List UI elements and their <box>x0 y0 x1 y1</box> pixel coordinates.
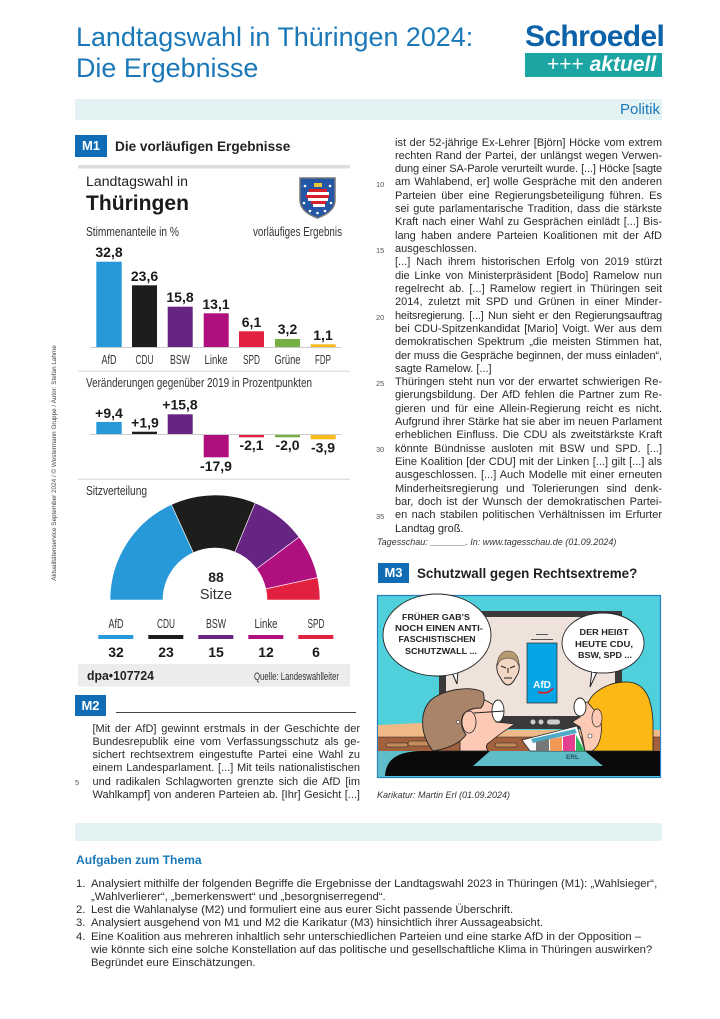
tasks list: 3. <box>76 917 85 929</box>
chart note: vorläufiges Ergebnis <box>253 224 342 239</box>
M1 badge: M1 <box>82 138 100 153</box>
bar chart: vote shares: 23,6 <box>131 268 158 284</box>
line numbers: 10 <box>376 180 384 188</box>
legend: seats per party: 15 <box>208 644 224 660</box>
M2 continued text: Thüringen steht nun vor der erwartet schwierigen Re- <box>395 376 662 388</box>
tasks list: 1. <box>76 878 85 890</box>
legend: seats per party: 12 <box>258 644 274 660</box>
M2 continued text: demokratischen Spektrum „die meisten Stimmen hat, <box>395 336 662 348</box>
M1 heading: Die vorläufigen Ergebnisse <box>115 139 290 154</box>
chart subtitle: Stimmenanteile in % <box>86 224 179 239</box>
legend: seats per party: BSW <box>206 616 226 631</box>
M2 text: [Mit der AfD] gewinnt erstmals in der Geschichte der <box>92 722 360 734</box>
M2 continued text: 2014, zuletzt mit SPD und Grünen in einer Minder- <box>395 296 662 308</box>
M2 continued text: heitsregierung. [...] Nun sieht er den Regierungsauftrag <box>395 310 662 322</box>
bar chart: vote shares: Grüne <box>274 352 300 367</box>
M2 continued text: Landtag groß. <box>395 523 464 535</box>
tasks list: wie könnte sich eine solche Konstellation auf das politische und gesellschaftliche Klima in Thüringen auswirken? <box>91 944 652 956</box>
speech bubble right <box>562 613 644 687</box>
M2 text: Bundesrepublik eine vom Verfassungsschutz als ge- <box>92 736 360 748</box>
screen <box>439 611 622 729</box>
speech bubble left: FASCHISTISCHEN <box>398 635 476 644</box>
M2 continued text: rechten Rand der Partei, der unlängst wegen Verwen- <box>395 150 662 162</box>
bar chart: vote shares: 13,1 <box>202 296 230 312</box>
M2 continued text <box>395 136 662 535</box>
bar chart: vote shares: BSW <box>170 352 190 367</box>
logo: Schroedel aktuell <box>525 20 664 77</box>
foreground <box>378 751 660 776</box>
tasks list: Analysiert mithilfe der folgenden Begriffe die Ergebnisse der Landtagswahl 2023 in Thüringen (M1): „Wahlsieger“, <box>91 878 657 890</box>
M2 continued text: erheblichen Einfluss. Die CDU als zweitstärkste Kraft <box>395 429 662 441</box>
speech bubble left: FRÜHER GAB’S <box>402 613 471 622</box>
M3 badge <box>378 563 409 583</box>
chart heading <box>86 174 189 215</box>
cartoon caption: Karikatur: Martin Erl (01.09.2024) <box>377 790 510 800</box>
legend: seats per party: CDU <box>157 616 175 631</box>
bar chart: vote shares: SPD <box>243 352 260 367</box>
legend: seats per party: SPD <box>308 616 324 631</box>
legend: seats per party <box>98 616 333 660</box>
bar chart: changes from 2019 <box>90 396 341 474</box>
M2 continued text: [...] Nach ihrem historischen Erfolg von 2019 stürzt <box>395 256 662 268</box>
M2 continued text: Eine Koalition [der CDU] mit der Linken [...] gilt [...] als <box>395 456 662 468</box>
legend: seats per party: Linke <box>254 616 278 631</box>
M2 text: einem Landesparlament. [...] Mit teils nationalistischen <box>92 762 360 774</box>
M2 text: Wahlkampf] von anderen Parteien ab. [Ihr] Gesicht [...] <box>92 789 360 801</box>
header band: Politik: Politik <box>620 101 660 118</box>
legend: seats per party: 32 <box>108 644 124 660</box>
bar chart: changes from 2019: -2,1 <box>239 437 264 453</box>
M2 continued text: lang haben andere Parteien Koalitionen mit der AfD <box>395 230 662 242</box>
tasks list: „Wahlverlierer“, „bemerkenswert“ und „besorgniserregend“. <box>91 890 386 902</box>
bar chart: vote shares: 32,8 <box>95 244 123 260</box>
M2 continued text: die Linke von Ministerpräsident [Bodo] Ramelow nun <box>395 270 662 282</box>
M2 continued text: regelrecht ab. [...] Ramelow regiert in Thüringen seit <box>395 283 662 295</box>
M2 continued text: Minderheitsregierung und Tolerierungen sind denk- <box>395 483 662 495</box>
legend: seats per party: AfD <box>108 616 124 631</box>
M2 answer line <box>116 712 356 713</box>
tasks list <box>76 878 657 969</box>
bar chart: changes from 2019: +1,9 <box>131 414 159 430</box>
seat total: Sitze <box>200 587 232 603</box>
source strip: dpa•107724 <box>87 668 155 683</box>
M2 continued text: Parteien über eine Regierungsbeteiligung führen. Es <box>395 190 662 202</box>
legend: seats per party: 6 <box>312 644 320 660</box>
desk <box>378 722 660 751</box>
title: Die Ergebnisse <box>76 52 258 82</box>
M2 continued text: gierungsbildung. Der AfD fehlen die Partner zum Re- <box>395 389 662 401</box>
M2 continued text: Kraft nach einer Wahl zu Gesprächen einlädt [...] Bis- <box>395 216 662 228</box>
tasks list: 2. <box>76 904 85 916</box>
speech bubble right: DER HEIẞT <box>580 628 629 637</box>
tasks list: Lest die Wahlanalyse (M2) und formuliert eine aus eurer Sicht passende Überschrift. <box>91 904 513 916</box>
M2 continued text: dung einer SA-Parole verurteilt wurde. [...] Höcke [sagte <box>395 163 662 175</box>
bar chart: vote shares: Linke <box>204 352 228 367</box>
bar chart: changes from 2019: -17,9 <box>200 458 232 474</box>
bar chart: changes from 2019: +9,4 <box>95 405 123 421</box>
logo: Schroedel aktuell: +++ aktuell <box>547 53 656 76</box>
M2 continued text: sagte Ramelow. [...] <box>395 363 492 375</box>
M2 continued text: ausgeschlossen. [...] Auch Modelle mit einer erneuten <box>395 469 662 481</box>
bar chart: vote shares: CDU <box>136 352 154 367</box>
source strip: Quelle: Landeswahlleiter <box>254 671 339 683</box>
bar chart: vote shares: 1,1 <box>313 327 333 343</box>
line numbers <box>376 180 384 520</box>
M2 continued text: könnte Bündnisse ausloten mit BSW und SPD. [...] <box>395 443 662 455</box>
tasks list: Eine Koalition aus mehreren inhaltlich sehr unterschiedlichen Parteien und eine starke AfD in der Opposition – <box>91 930 641 942</box>
side credit: Aktualitätenservice September 2024 / © Westermann Gruppe / Autor: Stefan Lahme <box>51 345 58 581</box>
bar chart: vote shares <box>90 244 341 367</box>
M3 badge: M3 <box>384 565 403 580</box>
M1 badge <box>75 135 107 157</box>
bar chart: vote shares: 3,2 <box>278 321 297 337</box>
bottom band <box>75 823 662 841</box>
tasks heading: Aufgaben zum Thema <box>76 853 202 867</box>
bar chart: vote shares: 6,1 <box>242 314 261 330</box>
chart heading: Landtagswahl in <box>86 174 188 189</box>
magazine <box>522 726 585 751</box>
AfD poster: AfD <box>533 680 551 691</box>
M2 text <box>92 722 360 801</box>
logo: Schroedel aktuell: Schroedel <box>525 20 664 53</box>
cartoon <box>376 594 662 778</box>
portrait <box>497 651 519 685</box>
icon: Thuringia coat of arms <box>300 178 335 218</box>
man <box>423 689 515 751</box>
M2 continued text: ausgeschlossen. <box>395 243 477 255</box>
bar chart: changes from 2019: -3,9 <box>311 440 335 456</box>
tasks list: Analysiert ausgehend von M1 und M2 die Karikatur (M3) hinsichtlich ihrer Aussageabsicht. <box>91 917 543 929</box>
speech bubble left: NOCH EINEN ANTI- <box>395 624 483 633</box>
line numbers: 30 <box>376 445 384 454</box>
speech bubble right: HEUTE CDU, <box>575 640 633 649</box>
speech bubble left: SCHUTZWALL ... <box>405 647 477 656</box>
bar chart: changes from 2019: -2,0 <box>275 437 300 453</box>
foreground: ERL <box>566 754 579 761</box>
M2 source: Tagesschau: _______. In: www.tagesschau.de (01.09.2024) <box>377 537 616 547</box>
speech bubble left <box>383 594 491 684</box>
M2 continued text: Aufgrund ihrer Stärke hat sie aber im neuen Parlament <box>395 416 662 428</box>
seat total: 88 <box>208 569 224 585</box>
tasks list: 4. <box>76 930 85 942</box>
bar chart: changes from 2019: +15,8 <box>162 396 198 412</box>
speech bubble right: BSW, SPD ... <box>578 651 632 660</box>
M2 continued text: gieren und für eine Allein-Regierung reicht es nicht. <box>395 403 662 415</box>
M2 badge <box>75 695 106 716</box>
M3 heading: Schutzwall gegen Rechtsextreme? <box>417 566 637 581</box>
title <box>76 22 473 82</box>
woman <box>572 682 653 751</box>
source strip <box>78 664 350 687</box>
M2 continued text: der muss die Gespräche beginnen, der muss einladen“, <box>395 350 662 362</box>
M2 continued text: ist der 52-jährige Ex-Lehrer [Björn] Höcke vom extrem <box>395 136 662 148</box>
bar chart: vote shares: 15,8 <box>166 289 194 305</box>
line numbers: 35 <box>376 512 384 520</box>
M2 continued text: am Wahlabend, er] wolle Gespräche mit den anderen <box>395 176 662 188</box>
legend: seats per party: 23 <box>158 644 174 660</box>
AfD poster <box>527 643 557 703</box>
M2 continued text: en nach stabilen politischen Verhältnissen im Erfurter <box>395 509 662 521</box>
title: Landtagswahl in Thüringen 2024: <box>76 22 473 52</box>
M2 text: und radikalen Schlagworten grenzte sich die AfD [im <box>92 776 360 788</box>
header band: Politik <box>75 99 662 120</box>
seat total <box>200 569 232 603</box>
line numbers: 15 <box>376 246 384 254</box>
M2 badge: M2 <box>81 698 100 713</box>
tasks list: Begründet eure Einschätzungen. <box>91 957 256 969</box>
chart heading: Thüringen <box>86 191 189 215</box>
chart subtitle: changes: Veränderungen gegenüber 2019 in Prozentpunkten <box>86 375 312 390</box>
bar chart: vote shares: AfD <box>102 352 116 367</box>
chart subtitle: seats: Sitzverteilung <box>86 483 147 498</box>
line number 5: 5 <box>75 778 79 787</box>
M2 continued text: sei gute parlamentarische Tradition, dass die stärkste <box>395 203 662 215</box>
bar chart: vote shares: FDP <box>315 352 331 367</box>
line numbers: 20 <box>376 312 384 322</box>
M2 continued text: bei CDU-Spitzenkandidat [Mario] Voigt. Wer aus dem <box>395 323 662 335</box>
M2 text: sichert rechtsextrem eingestufte Partei eine Wahl zu <box>92 749 360 761</box>
M2 continued text: bar, doch ist der Wunsch der demokratischen Partei- <box>395 496 662 508</box>
chart: seat distribution semicircle <box>110 495 320 600</box>
line numbers: 25 <box>376 378 384 388</box>
